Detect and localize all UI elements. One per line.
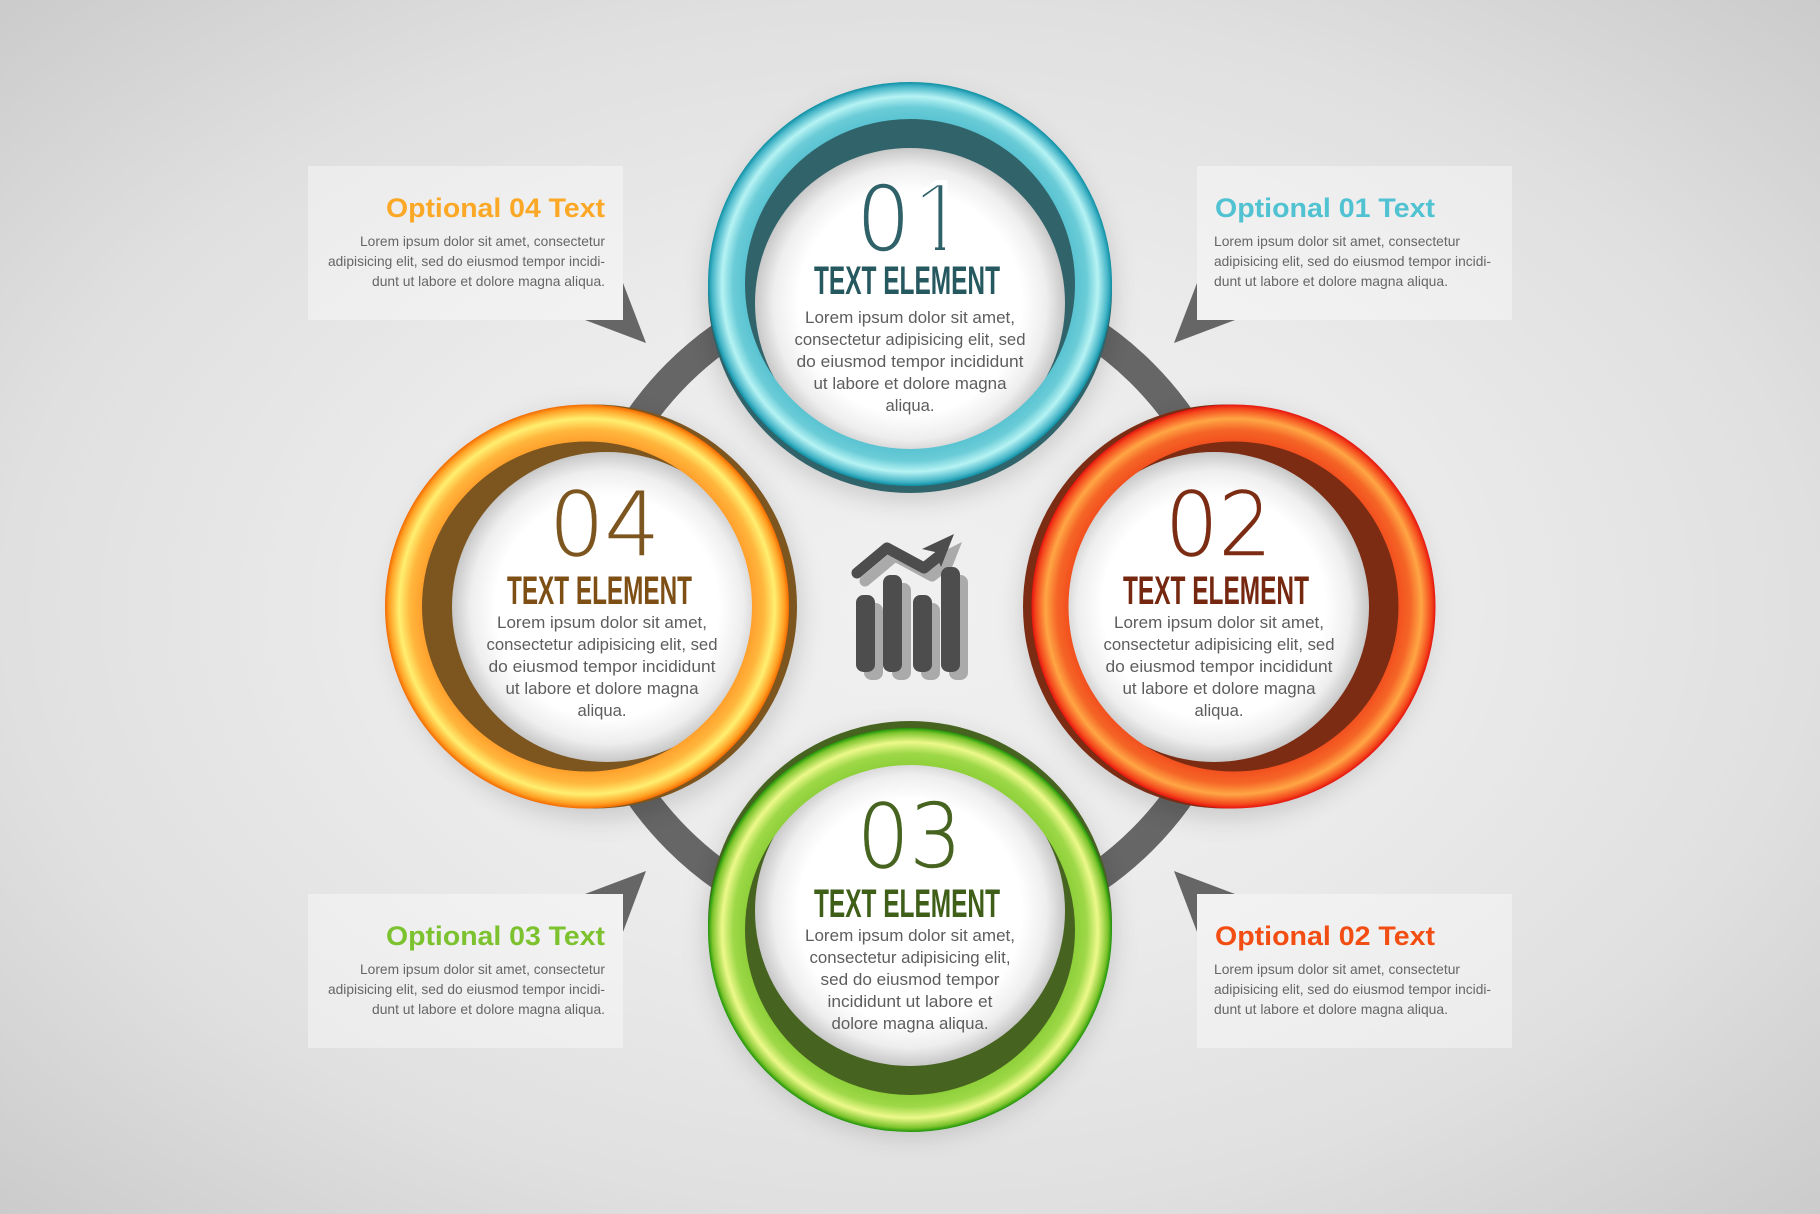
text: optional 01 [1214, 233, 1491, 289]
panel: optional 02 [1174, 871, 1512, 1048]
text 01 [794, 309, 1026, 415]
text 03: incididunt ut labore et [828, 993, 993, 1011]
arrow: optional 04 [585, 283, 646, 343]
text: optional 01: adipisicing elit, sed do eiusmod tempor incidi- [1214, 253, 1491, 269]
text 03: Lorem ipsum dolor sit amet, [805, 927, 1015, 945]
number 03: 03 [857, 785, 962, 888]
text: optional 03: Lorem ipsum dolor sit amet, consectetur [360, 961, 605, 977]
heading 04: TEXT ELEMENT [507, 569, 692, 613]
text 01: ut labore et dolore magna [814, 375, 1007, 393]
text 03: sed do eiusmod tempor [820, 971, 1000, 989]
panel: optional 04 [308, 166, 646, 343]
text 02: ut labore et dolore magna [1122, 680, 1316, 698]
ring 04 [404, 423, 770, 790]
heading 01: TEXT ELEMENT [814, 259, 1000, 303]
text 04: consectetur adipisicing elit, sed [486, 636, 718, 654]
text 02: Lorem ipsum dolor sit amet, [1114, 614, 1324, 632]
text 03 [805, 927, 1015, 1033]
heading 03: TEXT ELEMENT [814, 882, 1000, 926]
text: optional 03: dunt ut labore et dolore magna aliqua. [372, 1001, 605, 1017]
heading: optional 02: Optional 02 Text [1215, 921, 1435, 951]
heading: optional 04: Optional 04 Text [386, 193, 605, 223]
heading: optional 03: Optional 03 Text [386, 921, 605, 951]
text: optional 03 [328, 961, 605, 1017]
text 02: consectetur adipisicing elit, sed [1104, 636, 1334, 654]
panel: optional 01 [1174, 166, 1512, 343]
panel: optional 03 [308, 871, 646, 1048]
text 04: do eiusmod tempor incididunt [488, 658, 716, 676]
text: optional 04: dunt ut labore et dolore magna aliqua. [372, 273, 605, 289]
text 04: ut labore et dolore magna [506, 680, 699, 698]
heading: optional 01: Optional 01 Text [1215, 193, 1435, 223]
text: optional 02 [1214, 961, 1491, 1017]
arrow: optional 02 [1174, 871, 1235, 932]
number 01 [864, 180, 947, 252]
text 01: aliqua. [886, 397, 934, 415]
text: optional 04 [328, 233, 605, 289]
text 02 [1104, 614, 1334, 720]
text 04 [486, 614, 718, 720]
heading 02: TEXT ELEMENT [1123, 569, 1309, 613]
connecting ring [581, 278, 1239, 936]
text 03: dolore magna aliqua. [832, 1015, 988, 1033]
circle 02 [1021, 404, 1431, 819]
text: optional 02: adipisicing elit, sed do eiusmod tempor incidi- [1214, 981, 1491, 997]
text 04: aliqua. [578, 702, 626, 720]
text 01: do eiusmod tempor incididunt [796, 353, 1024, 371]
ring 03 [726, 746, 1094, 1114]
number 04: 04 [549, 473, 660, 576]
number 01: 0 [856, 168, 910, 270]
text: optional 01: Lorem ipsum dolor sit amet, consectetur [1214, 233, 1460, 249]
number 01: 1 [910, 162, 967, 274]
text 01: Lorem ipsum dolor sit amet, [805, 309, 1015, 327]
text: optional 01: dunt ut labore et dolore magna aliqua. [1214, 273, 1448, 289]
text 04: Lorem ipsum dolor sit amet, [497, 614, 707, 632]
text 02: aliqua. [1194, 702, 1244, 720]
text 03: consectetur adipisicing elit, [810, 949, 1010, 967]
icon: rising bar chart with arrow [856, 534, 968, 680]
text: optional 04: Lorem ipsum dolor sit amet, consectetur [360, 233, 605, 249]
text: optional 02: Lorem ipsum dolor sit amet, consectetur [1214, 961, 1460, 977]
ring 01 [726, 100, 1094, 468]
number 02: 02 [1165, 473, 1272, 576]
ring 02 [1050, 423, 1417, 790]
circle 03 [705, 721, 1115, 1137]
circle 04 [392, 404, 802, 819]
text 01: consectetur adipisicing elit, sed [794, 331, 1026, 349]
arrow: optional 03 [585, 871, 646, 932]
text: optional 03: adipisicing elit, sed do eiusmod tempor incidi- [328, 981, 605, 997]
circle 01 [705, 89, 1115, 502]
text: optional 04: adipisicing elit, sed do eiusmod tempor incidi- [328, 253, 605, 269]
text: optional 02: dunt ut labore et dolore magna aliqua. [1214, 1001, 1448, 1017]
text 02: do eiusmod tempor incididunt [1106, 658, 1333, 676]
arrow: optional 01 [1174, 283, 1235, 343]
